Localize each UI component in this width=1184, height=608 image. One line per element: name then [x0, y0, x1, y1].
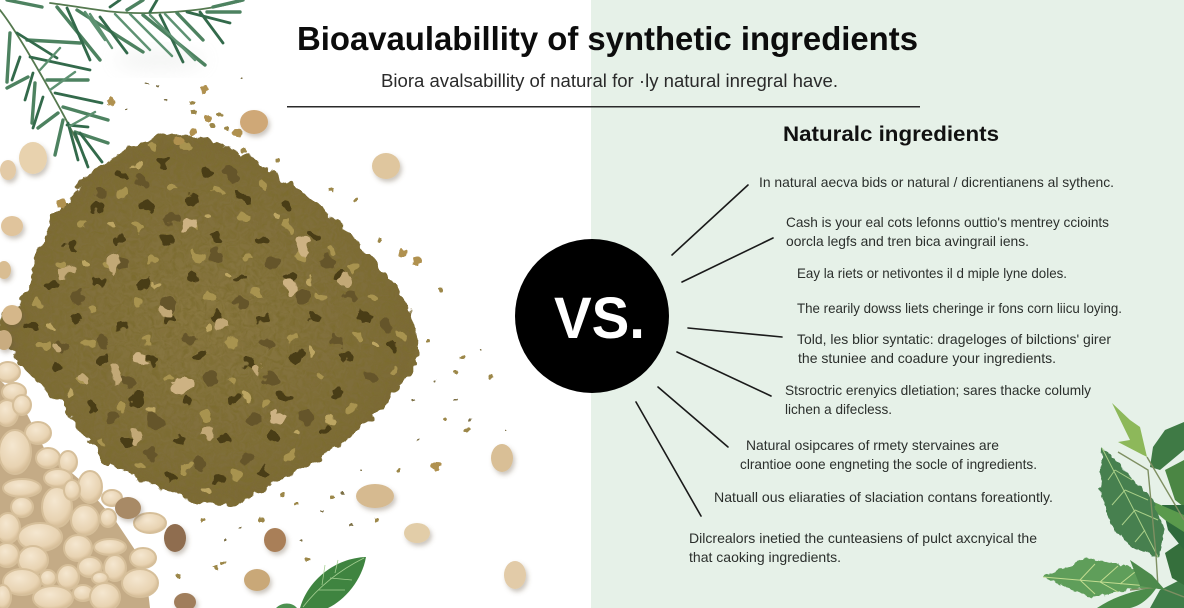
panel: left white background: [0, 0, 591, 608]
heading: natural ingredients: Naturalc ingredients: [783, 122, 999, 146]
pile pale gold chips: [50, 165, 377, 492]
connector lines: [636, 185, 782, 516]
illustration: leaves bottom right: [1043, 403, 1184, 608]
text list: natural ingredient notes: [689, 174, 1122, 565]
text list: natural ingredient notes: In natural aecva bids or natural / dicrentianens al sythenc.: [759, 174, 1114, 190]
illustration: pine branch top left: [0, 0, 243, 167]
VS circle badge: VS.: [554, 286, 645, 351]
text list: natural ingredient notes: clrantioe oone engneting the socle of ingredients.: [740, 456, 1037, 472]
pile pale nut chunks: [139, 224, 303, 419]
VS circle badge: [515, 239, 669, 393]
illustration: scattered nuts: [0, 110, 526, 608]
panel: right pale green background: [591, 0, 1184, 608]
illustration: green leaf bottom left: [276, 557, 366, 608]
text list: natural ingredient notes: Cash is your eal cots lefonns outtio's mentrey ccioints: [786, 214, 1109, 230]
pile shape: [0, 135, 420, 506]
text list: natural ingredient notes: Told, les blior syntatic: drageloges of bilctions' girer: [797, 331, 1111, 347]
text list: natural ingredient notes: Dilcrealors inetied the cunteasiens of pulct axcnyical the: [689, 530, 1037, 546]
divider rule: [287, 106, 920, 108]
illustration: scattered powder specks: [61, 78, 506, 576]
text list: natural ingredient notes: the stuniee and coadure your ingredients.: [798, 350, 1056, 366]
pile golden chips: [35, 145, 403, 478]
text list: natural ingredient notes: Stsroctric erenyics dletiation; sares thacke columly: [785, 382, 1091, 398]
illustration: powder pile: [0, 135, 420, 506]
pile dark chips: [30, 160, 393, 480]
pile deep brown chips: [60, 172, 388, 463]
text list: natural ingredient notes: Natural osipcares of rmety stervaines are: [746, 437, 999, 453]
subtitle: Biora avalsabillity of natural for ·ly natural inregral have.: [381, 71, 838, 91]
illustration: pale seeds bottom left: [0, 362, 166, 608]
text list: natural ingredient notes: The rearily dowss liets cheringe ir fons corn liicu loying.: [797, 300, 1122, 316]
title: Bioavaulabillity of synthetic ingredients: [297, 20, 918, 57]
text list: natural ingredient notes: that caoking ingredients.: [689, 549, 841, 565]
text list: natural ingredient notes: Eay la riets or netivontes il d miple lyne doles.: [797, 265, 1067, 281]
text list: natural ingredient notes: oorcla legfs and tren bica avingrail iens.: [786, 233, 1029, 249]
text list: natural ingredient notes: Natuall ous eliaraties of slaciation contans foreationtly.: [714, 489, 1053, 505]
text list: natural ingredient notes: lichen a difecless.: [785, 401, 892, 417]
